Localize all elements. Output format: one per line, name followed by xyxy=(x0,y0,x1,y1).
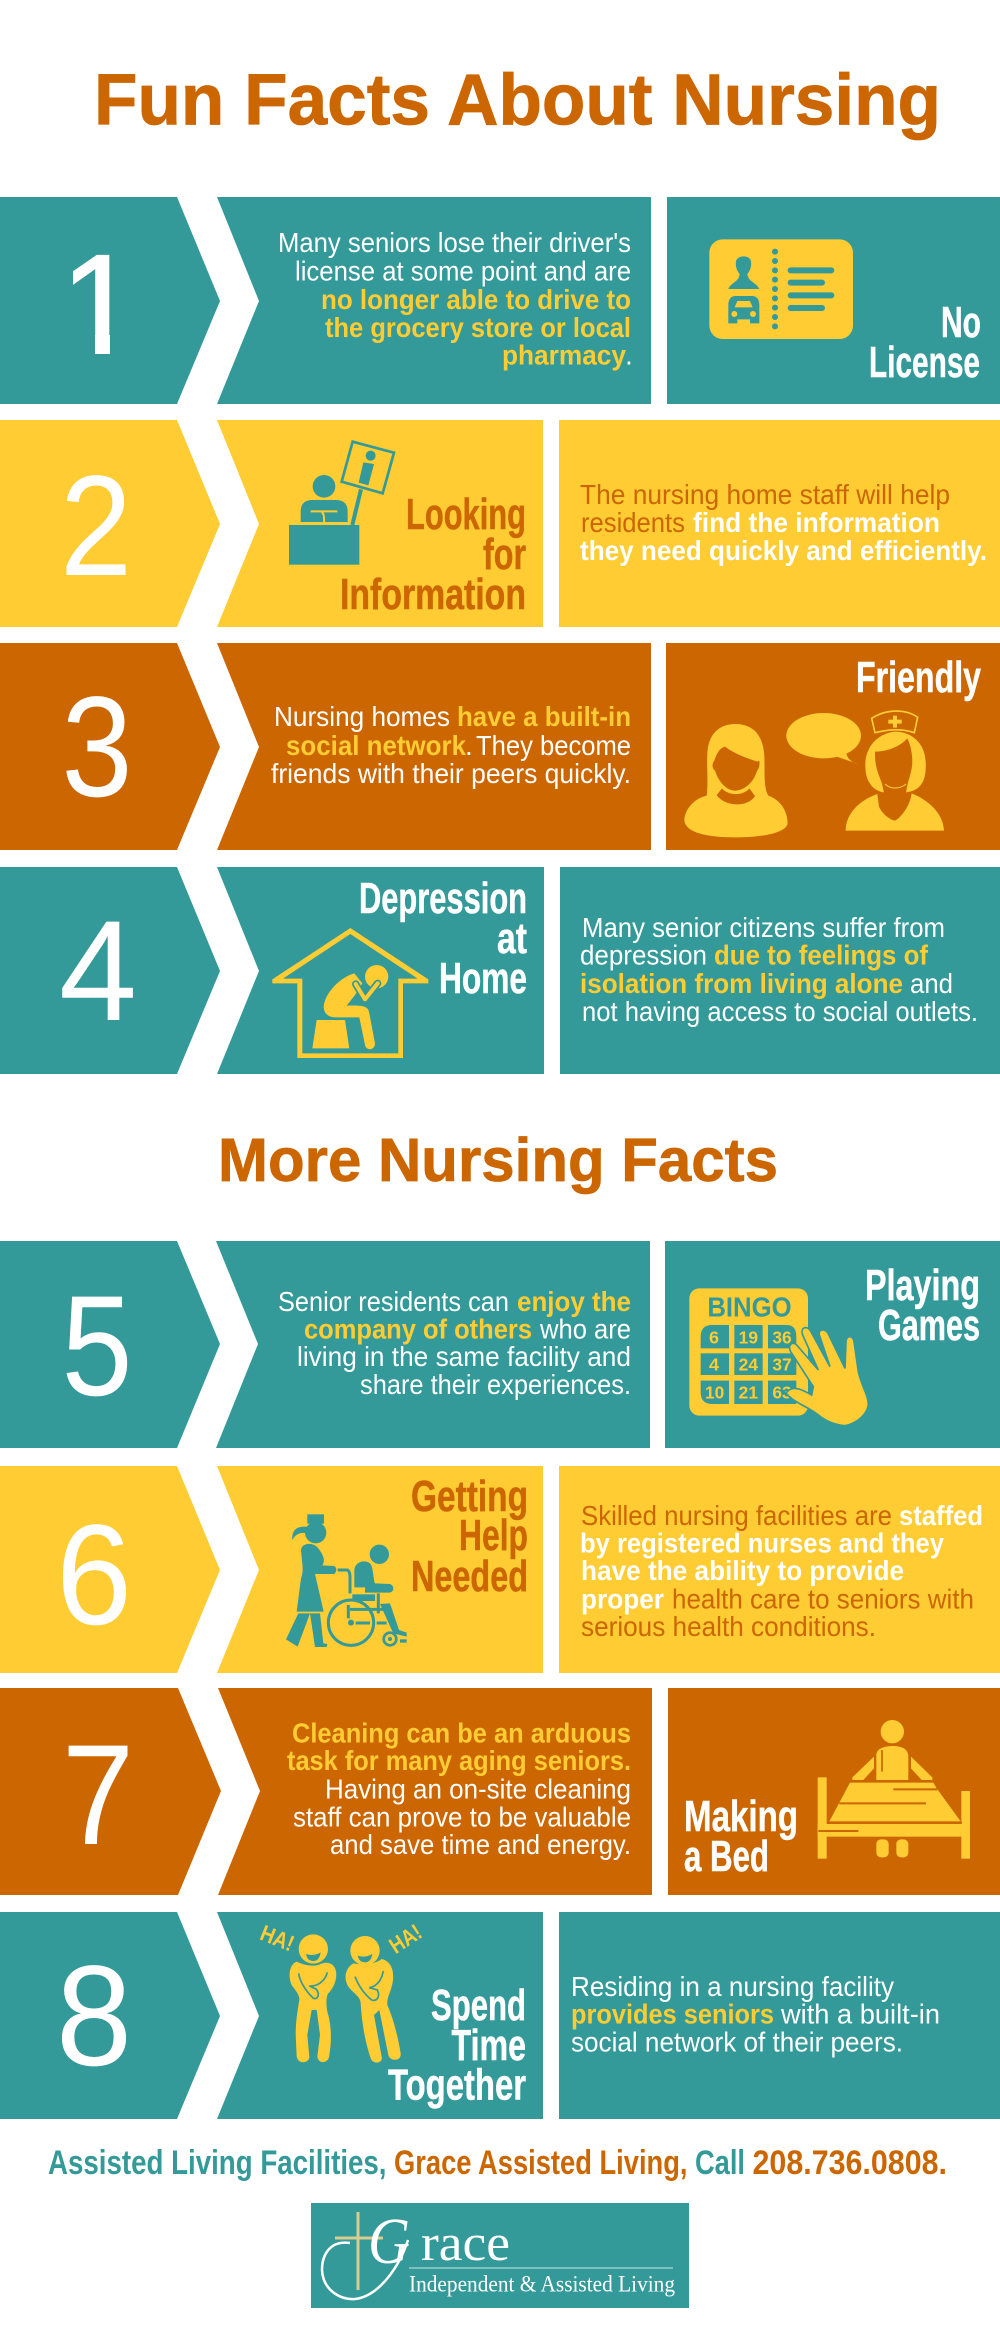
number chevron 8 xyxy=(0,1912,220,2119)
icon: bingo card and hand xyxy=(689,1288,868,1426)
heading: depression at home xyxy=(359,874,527,1003)
icon: nurse pushing wheelchair xyxy=(286,1514,407,1647)
panel: fact 3 text xyxy=(217,643,651,850)
heading: looking for information xyxy=(340,490,526,619)
number chevron 1: 1 xyxy=(60,226,140,385)
logo: Grace Independent & Assisted Living: race xyxy=(421,2215,510,2272)
number chevron 8: 8 xyxy=(56,1937,132,2096)
panel: fact 5 text: Senior residents can xyxy=(278,1286,509,1317)
panel: fact 7 text: Cleaning can be an arduous xyxy=(292,1718,631,1748)
panel: fact 7 text: task for many aging seniors. xyxy=(287,1745,631,1776)
panel: fact 6 text: proper xyxy=(581,1584,664,1615)
number chevron 2: 2 xyxy=(60,447,132,606)
panel: spend time together xyxy=(217,1912,543,2119)
panel: fact 1 xyxy=(0,197,1000,404)
panel: fact 4 text: Many senior citizens suffer from xyxy=(582,912,945,943)
icon: bingo card and hand: 36 xyxy=(772,1327,792,1347)
heading: looking for information: Looking xyxy=(406,490,526,539)
panel: fact 1 text: . xyxy=(625,340,633,370)
panel: playing games xyxy=(665,1241,1000,1448)
icon: bingo card and hand: 21 xyxy=(739,1383,758,1403)
number chevron 3 xyxy=(0,643,220,850)
heading: spend time together xyxy=(388,1981,526,2110)
panel: fact 6 text: serious health conditions. xyxy=(581,1611,876,1642)
panel: fact 5 text xyxy=(216,1241,650,1448)
number chevron 1 xyxy=(0,197,220,404)
number chevron 3: 3 xyxy=(62,668,132,827)
icon: person making bed xyxy=(818,1720,970,1859)
number chevron 5 xyxy=(0,1241,220,1448)
panel: fact 2 xyxy=(0,420,1000,627)
panel: fact 4 xyxy=(0,867,1000,1074)
panel: fact 2 text: The nursing home staff will help xyxy=(580,479,950,510)
footer call to action: Call xyxy=(695,2144,745,2182)
heading: getting help needed: Needed xyxy=(411,1552,528,1601)
panel: fact 7 text: Having an on-site cleaning xyxy=(325,1774,631,1805)
panel: fact 5 text: who are xyxy=(539,1314,631,1345)
panel: fact 1 text: license at some point and are xyxy=(295,256,631,286)
panel: fact 8 xyxy=(0,1912,1000,2119)
heading: playing games xyxy=(865,1261,980,1350)
panel: fact 2 text xyxy=(559,420,1000,627)
panel: fact 3 text: have a built-in xyxy=(457,701,631,732)
panel: fact 4 text: and xyxy=(910,968,953,999)
heading: spend time together: Time xyxy=(452,2021,526,2070)
heading: depression at home: Depression xyxy=(359,874,527,923)
panel: fact 5 text: share their experiences. xyxy=(360,1369,631,1400)
number chevron 2 xyxy=(0,420,220,627)
icon: license card xyxy=(709,239,853,339)
heading: getting help needed: Help xyxy=(459,1511,528,1560)
panel: friendly xyxy=(666,643,1000,850)
panel: fact 8 text: provides seniors xyxy=(571,1999,774,2030)
heading: spend time together: Spend xyxy=(431,1981,526,2030)
panel: fact 3 text: They become xyxy=(476,730,631,761)
panel: fact 3 text: Nursing homes xyxy=(274,701,450,732)
panel: fact 1 text xyxy=(217,197,651,404)
heading: depression at home: Home xyxy=(439,954,527,1003)
number chevron 6: 6 xyxy=(56,1496,132,1655)
icon: bingo card and hand: 10 xyxy=(705,1383,724,1403)
panel: fact 6 text: staffed xyxy=(899,1500,983,1531)
heading: spend time together: Together xyxy=(388,2060,526,2110)
panel: fact 6 text xyxy=(559,1466,1000,1673)
icon: bingo card and hand: 24 xyxy=(739,1355,758,1375)
icon: two people laughing xyxy=(257,1919,426,2063)
title: Fun Facts About Nursing xyxy=(94,60,941,140)
panel: fact 7 text: staff can prove to be valuable xyxy=(293,1802,631,1832)
heading: looking for information: for xyxy=(483,530,526,579)
panel: fact 3 text: friends with their peers quickly. xyxy=(271,758,631,789)
icon: two people laughing: HA! xyxy=(384,1919,426,1959)
panel: fact 1 text: pharmacy xyxy=(502,340,626,370)
panel: fact 5 text: enjoy the xyxy=(517,1286,631,1317)
icon: bingo card and hand: 4 xyxy=(709,1355,719,1375)
icon: resident talking to nurse xyxy=(684,711,944,837)
panel: fact 1 text: the grocery store or local xyxy=(325,312,631,343)
number chevron 6 xyxy=(0,1466,220,1673)
panel: fact 8 text xyxy=(559,1912,1000,2119)
panel: fact 1 text: Many seniors lose their driver's xyxy=(278,227,631,258)
icon: bingo card and hand: BINGO xyxy=(707,1292,792,1323)
footer call to action: Grace Assisted Living, xyxy=(394,2144,688,2182)
number chevron 7: 7 xyxy=(62,1716,134,1875)
panel: fact 2 text: find the information xyxy=(693,507,940,538)
panel: depression at home xyxy=(217,867,544,1074)
footer call to action: 208.736.0808. xyxy=(752,2144,947,2182)
logo: Grace Independent & Assisted Living: G xyxy=(368,2205,410,2278)
heading: no license xyxy=(869,298,981,387)
panel: fact 7 xyxy=(0,1688,1000,1895)
panel: fact 7 text xyxy=(218,1688,652,1895)
icon: bingo card and hand: 19 xyxy=(739,1327,758,1347)
panel: fact 3 text: . xyxy=(465,730,473,761)
icon: bingo card and hand: 63 xyxy=(772,1383,792,1403)
heading: making a bed xyxy=(684,1792,798,1881)
heading: looking for information: Information xyxy=(340,570,526,619)
panel: fact 6 text: by registered nurses and they xyxy=(580,1528,944,1558)
panel: making a bed xyxy=(668,1688,1000,1895)
panel: looking for information xyxy=(217,420,543,627)
heading: more nursing facts: More Nursing Facts xyxy=(218,1126,778,1194)
number chevron 4 xyxy=(0,867,220,1074)
panel: getting help needed xyxy=(217,1466,543,1673)
footer call to action: Assisted Living Facilities, xyxy=(48,2144,386,2182)
panel: fact 5 text: company of others xyxy=(304,1314,532,1345)
panel: fact 6 text: Skilled nursing facilities are xyxy=(581,1500,892,1531)
icon: two people laughing: HA! xyxy=(257,1920,298,1956)
number chevron 7 xyxy=(0,1688,221,1895)
heading: making a bed: a Bed xyxy=(684,1832,769,1881)
panel: fact 8 text: social network of their peers. xyxy=(571,2026,903,2058)
icon: bingo card and hand: 6 xyxy=(709,1327,719,1347)
number chevron 5: 5 xyxy=(62,1267,132,1426)
panel: fact 6 text: health care to seniors with xyxy=(672,1584,974,1615)
panel: fact 6 xyxy=(0,1466,1000,1673)
panel: fact 3 text: social network xyxy=(286,730,466,761)
heading: getting help needed xyxy=(411,1472,528,1601)
logo: Grace Independent & Assisted Living xyxy=(311,2203,689,2308)
panel: fact 4 text: depression xyxy=(580,940,707,970)
logo: Grace Independent & Assisted Living: Independent & Assisted Living xyxy=(409,2272,675,2296)
icon: person at information desk xyxy=(289,442,394,565)
icon: depressed person in house xyxy=(272,928,428,1058)
heading: no license: No xyxy=(941,298,981,347)
panel: fact 4 text: isolation from living alone xyxy=(580,968,903,999)
footer call to action xyxy=(48,2144,947,2182)
icon: bingo card and hand: 37 xyxy=(772,1355,792,1375)
panel: fact 7 text: and save time and energy. xyxy=(330,1829,631,1860)
heading: making a bed: Making xyxy=(684,1792,798,1841)
panel: fact 6 text: have the ability to provide xyxy=(581,1555,904,1586)
panel: fact 3 xyxy=(0,643,1000,850)
number chevron 4: 4 xyxy=(59,892,137,1051)
panel: fact 8 text: with a built-in xyxy=(780,1999,940,2030)
panel: fact 1 text: no longer able to drive to xyxy=(321,284,631,315)
heading: getting help needed: Getting xyxy=(411,1472,528,1521)
panel: no license xyxy=(667,197,1000,404)
panel: fact 2 text: residents xyxy=(581,507,685,538)
panel: fact 5 text: living in the same facility and xyxy=(297,1341,631,1372)
panel: fact 4 text xyxy=(560,867,1000,1074)
panel: fact 8 text: Residing in a nursing facility xyxy=(571,1971,894,2002)
heading: depression at home: at xyxy=(497,914,527,963)
panel: fact 5 xyxy=(0,1241,1000,1448)
panel: fact 4 text: due to feelings of xyxy=(714,940,929,970)
